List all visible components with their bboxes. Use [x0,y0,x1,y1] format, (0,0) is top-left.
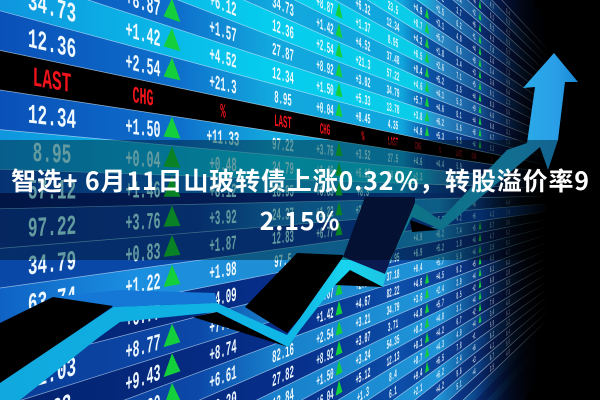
column: change 3: +4.6 [414,276,422,292]
column: percent 3: +2.6 [436,59,444,75]
column: last price 2: 27.87 [272,41,294,68]
column: percent 3: +6.2 [436,116,444,130]
column: percent 4: 4.7 [490,231,494,242]
column: change 3: +8.4 [414,62,422,79]
column: last price: 34.79 [28,246,76,283]
column: change 2: +3.76 [316,141,334,161]
column: last price 4: 6.8 [456,201,462,212]
column: change 4: +9 [472,103,476,116]
column: percent 3: +6.5 [436,352,444,370]
column: far right values: 4.9 [506,76,510,88]
column: percent 4: 6.8 [490,275,494,286]
column: change 4: +6 [472,19,476,32]
column: change 3: +8.7 [414,351,422,370]
column: last price 4: 3.7 [456,6,462,21]
column: percent 4: 4.7 [490,132,494,143]
column: percent 3: +4.5 [436,270,444,284]
column: far right values: 7.9 [506,208,510,217]
column: far right values: 3.8 [506,56,510,68]
column: change 4: +1 [472,331,476,344]
column: last price 2: 27.82 [272,364,294,393]
column: percent 4: 5.9 [490,318,494,330]
column: change 2: +1.50 [316,77,334,101]
column: last price: 8.95 [33,138,71,172]
column: change 4: +2 [472,283,476,296]
column: far right values: 5.7 [506,46,510,58]
column: percent 3: +5.7 [436,297,444,313]
column: percent: % [220,100,226,124]
column: percent: +8.12 [209,180,237,203]
column: percent 4: 7.8 [490,44,494,56]
column: change 2: +0.04 [316,98,334,121]
column: change: +1.46 [125,177,161,205]
column: change 3: +6.5 [414,47,422,64]
column: change 4: +2 [472,7,476,20]
column: percent 2: +1.37 [356,15,370,39]
column: far right values: 6.2 [506,167,510,177]
column: green triangles 2 [336,1,342,396]
column: far right values: 8.2 [506,16,510,29]
column: far right values: 8.7 [506,117,510,128]
column: green triangles 4 [479,0,481,323]
column: change 2: +2.54 [316,35,334,60]
column: far right values: 2.3 [506,97,510,108]
column: last price 2: 12.36 [272,17,294,46]
column: percent 4: 4.3 [490,286,494,297]
column: last price 2: LAST [274,113,292,135]
column: far right values: 4.4 [506,198,510,207]
column: change 4: +4 [472,271,476,283]
column: last price 4: 3.4 [456,175,462,186]
column: change: +1.42 [125,16,161,54]
column: far right values: 3.2 [506,317,510,329]
column: change 3: +4.2 [414,31,422,49]
column: change 2: +8.92 [316,56,334,80]
column: percent 2: +3.21 [356,311,370,333]
column: percent 4: 4.6 [490,110,494,121]
column: percent 3: % [439,145,441,157]
column: percent 4: 4.3 [490,33,494,45]
column: green triangles 3 [425,6,429,373]
column: last price 3: 4.35 [388,117,398,134]
column: last price 2: 97.5 [274,251,292,274]
column: percent 3: +5.2 [436,73,444,89]
column: far right values: 2.8 [506,267,510,278]
column: last price: 97.22 [28,211,76,245]
column: change 3: +8.2 [414,321,422,339]
column: percent 3: +2.4 [436,283,444,299]
column: last price 2: 18.95 [272,183,294,203]
column: last price 4: 4.8 [456,32,462,46]
column: last price 4: 5.9 [456,162,462,174]
column: percent 4 [490,0,494,375]
glass plate behind chart line [53,290,217,307]
column: percent 4: 2.9 [490,242,494,253]
column: change 3: +4.0 [414,124,422,139]
column: last price: 21.03 [28,352,76,397]
column: far right values: 6.4 [506,6,510,19]
column: change 3: +9.4 [414,366,422,385]
column: percent 4: % [491,155,493,165]
column: change 4: +4 [472,199,476,210]
column: last price 4: 9.2 [456,265,462,277]
column: change 4: +8 [472,55,476,68]
column: percent 4: 4.2 [490,210,494,220]
column: percent: +1.57 [209,16,237,49]
column: change 3: +3.6 [414,291,422,308]
right edge fade [480,0,600,400]
column: change: +1.50 [125,113,161,145]
column: percent 2: +8.45 [356,110,370,129]
column: percent: +4.52 [209,43,237,74]
column: last price 4: LAST [456,149,463,161]
column: percent 4: 4.5 [490,253,494,264]
column: far right values: 6.3 [506,36,510,49]
column: change 3: +3.8 [414,108,422,124]
column: change 2: CHG [320,120,330,140]
column: percent 4: 7.6 [490,296,494,308]
column: percent 4: 6.7 [490,351,494,364]
column: last price 4: 7.4 [456,226,462,238]
column: percent 4: 5.4 [490,66,494,78]
column: last price [28,0,76,400]
column: far right values: 4.6 [506,147,510,158]
column: last price 4: 2.4 [456,354,462,368]
column: last price 2: 97.22 [272,136,294,158]
column: last price 4: 7.1 [456,71,462,85]
column: change 2: +8.92 [316,344,334,371]
column: last price 4: 2.5 [456,84,462,97]
column: change 4: +8 [472,128,476,139]
column: percent: +4.09 [209,284,237,313]
column: last price 3: 82.22 [387,283,400,302]
column: last price 4: 9.6 [456,366,462,381]
column: change 4: +4 [472,319,476,332]
column: percent 3: +6.2 [436,228,444,242]
column: far right values: 6.6 [506,87,510,98]
column: change 4: +4 [472,91,476,104]
column: last price 3: 57.22 [387,65,400,85]
column: last price 2: 12.83 [272,228,294,251]
column: change 3: +4.6 [414,155,422,169]
column: last price 4: 5.3 [456,97,462,110]
column: last price: 12.34 [28,99,76,137]
column: far right values: 4.5 [506,297,510,309]
column: change 4: +5 [472,224,476,235]
column: change: +0.04 [125,145,161,175]
column: change 2: +8.07 [316,284,334,307]
column: last price 3: 34.79 [387,299,400,319]
column: percent: +6.61 [209,361,237,395]
column: change 2: +1.22 [316,203,334,223]
column: change 3: +4.6 [414,77,422,94]
column: change 2: +1.46 [316,162,334,181]
column: percent 4: 6.2 [490,22,494,35]
column: percent 3: +3.1 [436,17,444,34]
column: change: +0.83 [125,238,161,270]
column: percent 3: +4.4 [436,159,444,172]
column: percent 4: 2.6 [490,55,494,67]
column: change 4: +4 [472,140,476,151]
column: percent 2: +4.67 [356,293,370,314]
column: last price 3: 8.4 [389,366,397,386]
column: last price 3 [387,0,400,400]
column: far right values: 7.4 [506,137,510,148]
column: change 3 [414,0,422,400]
column: last price 4: 4.2 [456,214,462,225]
column: change 2: +6.77 [316,223,334,244]
column: last price 3: 18.95 [387,250,400,268]
column: percent 4: 4.7 [490,0,494,13]
column: change 2 [316,0,334,400]
column: last price 3: 13.78 [387,99,400,118]
column: last price 4: 3.5 [456,136,462,148]
column: change 4: +3 [472,355,476,368]
column: change 2: +2.54 [316,324,334,350]
column: change 4: CHG [472,152,476,163]
column: percent 3: +5.3 [436,130,444,144]
column: percent 4: 6.1 [490,88,494,100]
column: far right values: 5.2 [506,227,510,238]
column: change: CHG [132,82,154,113]
column: percent: +7.52 [209,309,237,340]
column: change 4: +4 [472,43,476,56]
column: last price 4 [456,0,463,394]
column: percent 4: 4.1 [490,340,494,352]
column: change: +6.77 [125,299,161,335]
column: change 4 [472,0,476,380]
column: last price 3: 3.71 [388,316,398,336]
column: change 3: +8.1 [414,336,422,354]
column: last price 3: 37.18 [387,267,400,285]
column: last price 4: 1.8 [456,239,462,251]
column: percent 2: +2.99 [356,275,370,296]
column: percent 2: +5.33 [356,91,370,111]
column: last price 4: 8.5 [456,290,462,303]
column: change: +2.54 [125,48,161,84]
column: percent 3: +4.1 [436,88,444,103]
column: percent 2: +4.52 [356,34,370,57]
column: last price: 57.12 [28,175,76,207]
column: change 3: +6.9 [414,246,422,261]
dark title band [0,140,600,260]
column: percent 3: +4.2 [436,380,444,398]
column: last price 4: 8.1 [456,110,462,123]
title: 智选+ 6月11日山玻转债上涨0.32%，转股溢价率9 [11,162,590,198]
column: far right values: 5.6 [506,336,510,349]
column: change 3: +4.9 [414,0,422,19]
column: change 4: +5 [472,79,476,92]
column: percent 4: 8.3 [490,99,494,111]
column: far right values: 4.7 [506,247,510,258]
column: change 3: CHG [415,140,421,154]
column: percent 4: 3.4 [490,307,494,319]
column: percent 3: +4.6 [436,102,444,117]
column: percent: +1.98 [209,258,237,286]
column: change 4: +2 [472,307,476,320]
column: last price 2: 12.34 [272,65,294,91]
column: percent 3: +5.7 [436,31,444,48]
column: last price 4: 6.7 [456,315,462,329]
column: percent 2: +3.24 [356,347,371,371]
column: last price 3: 34.79 [387,82,400,102]
column: far right values: 4.8 [506,346,510,359]
column: change 3: +4.8 [414,306,422,323]
column: change 4: +4 [472,295,476,308]
column: far right values: 7.2 [506,66,510,78]
column: far right values: 4.1 [506,26,510,39]
column: far right values: 6.3 [506,257,510,268]
title [11,162,590,238]
column: percent 4: 8.2 [490,329,494,341]
column: last price 3: 27.5 [388,151,398,167]
column: far right values: 3.1 [506,127,510,138]
column: last price 4: 6.2 [456,19,462,34]
column: percent 3: +1.8 [436,45,444,62]
column: percent 4: 3.9 [490,77,494,89]
column: percent 3: +1.5 [436,3,444,20]
column: change 2: +0.83 [316,183,334,201]
column: percent 2: +21.3 [356,53,370,75]
column: last price 4: 8.6 [456,45,462,59]
column: percent 2: +8.3 [357,185,369,201]
column: change 4: +4 [472,236,476,247]
column: percent 3 [436,0,444,398]
column: last price 2: 8.95 [274,89,292,113]
column: change: +9.43 [125,359,161,399]
column: change 2: +1.50 [316,365,334,392]
column: last price: LAST [33,62,71,101]
column: last price 3: 54.35 [387,332,400,353]
column: percent 3: +4.8 [436,311,444,327]
column: far right values: 8.1 [506,237,510,248]
column: far right values: 6.1 [506,307,510,319]
column: last price 2: 24.37 [272,206,294,227]
column: percent 3: +5.2 [436,242,444,256]
column: change 3: +2.3 [414,170,422,184]
column: percent: +1.87 [209,232,237,258]
column: last price 4: 3.4 [456,58,462,72]
column: percent 2: +1.87 [356,221,370,239]
column: change 2: +1.42 [316,14,334,40]
column: change 4: +6 [472,210,476,222]
column: last price: 12.36 [28,24,76,66]
column: last price 4: 7.8 [456,341,462,355]
column: percent 2: +2.52 [356,203,370,220]
column: last price 2: 82.16 [272,341,294,369]
column: last price 4: 5.1 [456,379,462,394]
column: change 4: +4 [472,367,476,380]
column: change 4: +1 [472,31,476,44]
column: last price 2: 24.79 [272,160,294,181]
column: percent 2: +5.12 [356,366,370,390]
column: percent 3: +5.7 [436,215,444,228]
title: 2.15% [260,202,340,238]
column: change 4: +5 [472,260,476,271]
column: percent 3: +5.7 [436,256,444,270]
column: change 4: +4 [472,248,476,259]
column: percent 4: 5.7 [490,220,494,231]
column: percent: +11.33 [207,125,239,152]
column: percent: +3.92 [209,206,237,231]
column: percent 2: % [362,130,365,146]
column: last price 4: 2.9 [456,277,462,290]
column: change 4: +3 [472,67,476,80]
column: green up triangles [164,0,180,400]
column: percent: +0.48 [209,153,237,178]
column: percent 4: 5.2 [490,144,494,154]
column: percent 4: 5.1 [490,264,494,275]
column: percent 4: 6.8 [490,121,494,132]
column: change 2: +1.42 [316,304,334,328]
column: last price 3: 34.7 [388,168,398,183]
column: last price: 63.74 [28,281,76,321]
column: last price 4: 5.6 [456,123,462,135]
column: change: +1.22 [125,268,161,302]
column: percent 4: 5.1 [490,11,494,24]
column: change 3: +5.7 [414,93,422,109]
column: percent: +8.74 [209,335,237,368]
column: far right values: 5.9 [506,277,510,288]
column: percent 3: +4.2 [436,325,444,341]
column: change: +8.77 [125,329,161,367]
column: percent 2: +3.07 [356,329,370,352]
column: percent [207,0,239,400]
black chart shadows [0,197,438,385]
column: change: +3.76 [125,208,161,238]
column: change 3: +8.7 [414,16,422,34]
column: last price 4: 5.6 [456,252,462,264]
column: change [125,0,161,400]
column: percent 3: +4.3 [436,338,444,355]
column: change 4: +6 [472,343,476,356]
column: last price 3: 12.34 [387,14,400,36]
column: percent: +21.3 [209,71,237,100]
column: far right values: 8.4 [506,326,510,339]
column: change 4: +4 [472,116,476,127]
column: percent 3: +6.2 [436,366,444,384]
column: last price 3: LAST [388,134,398,150]
column: far right values: 5.5 [506,107,510,118]
column: far right values [506,6,510,359]
column: change 3: +4.9 [414,231,422,246]
column: percent 2: +3.02 [356,72,370,93]
column: far right values: 3.6 [506,217,510,228]
column: change 3: +0.4 [414,261,422,277]
column: percent 2 [356,0,371,400]
column: last price 3: 37.48 [387,48,400,69]
column: last price 4: 4.9 [456,328,462,342]
column: last price 3: 12.13 [387,348,400,370]
column: last price 3: 18.3 [388,234,398,251]
column: far right values: 7.3 [506,287,510,298]
column: last price 4: 3.1 [456,303,462,316]
column: far right values: 5.8 [506,178,510,187]
column: percent 4: 7.1 [490,166,494,176]
column: last price 3: 8.95 [388,32,398,52]
column: percent 2: +3.52 [356,147,370,165]
column: percent 4: 3.5 [490,362,494,375]
column: percent 2: +6.12 [356,166,370,183]
column: last price 2 [272,0,294,400]
